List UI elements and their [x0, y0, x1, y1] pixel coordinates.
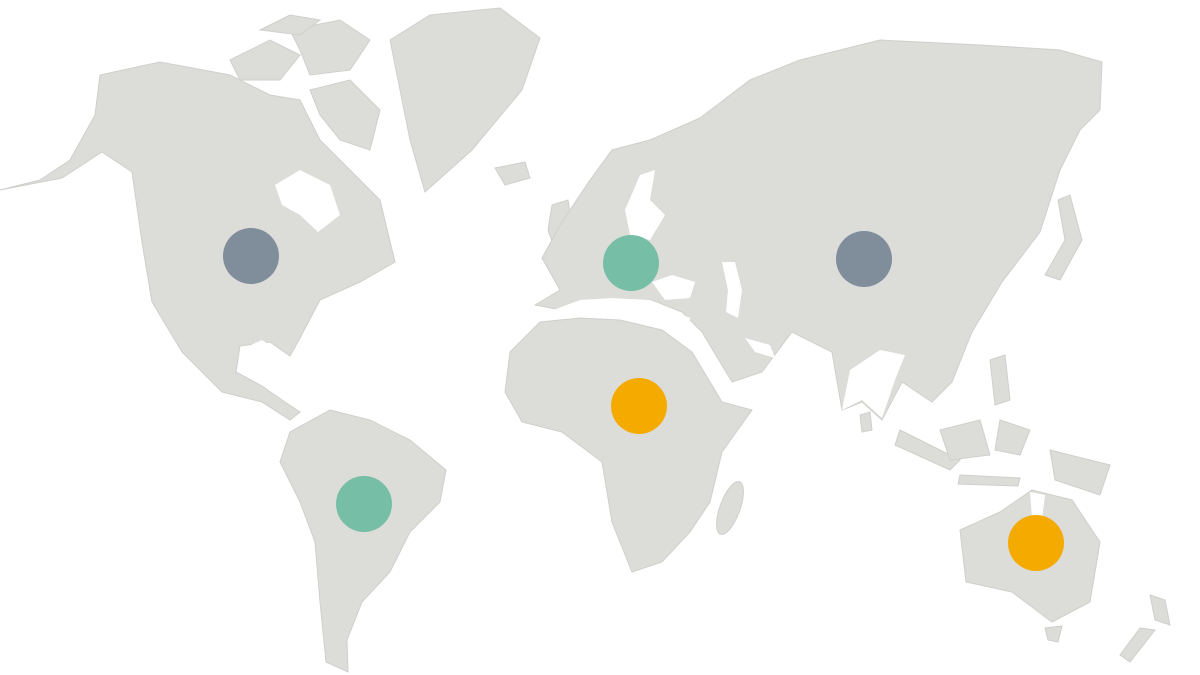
continent: australia — [960, 490, 1100, 622]
black sea — [652, 275, 695, 300]
continent: africa — [505, 318, 752, 572]
circle: asia — [836, 231, 892, 287]
persian gulf — [745, 338, 775, 358]
hudson bay — [275, 170, 340, 232]
mediterranean — [545, 298, 690, 330]
circle: south america — [336, 476, 392, 532]
islands of south east asia — [860, 355, 1110, 495]
continent: south america — [280, 410, 446, 672]
red sea — [690, 330, 740, 400]
tasmania — [1045, 626, 1062, 642]
uk — [548, 200, 575, 250]
circle: australia — [1008, 515, 1064, 571]
caspian sea — [722, 262, 742, 318]
arctic islands — [230, 15, 380, 150]
continent: eurasia — [535, 40, 1102, 420]
circle: europe — [603, 235, 659, 291]
iceland — [495, 162, 530, 185]
circle: africa — [611, 378, 667, 434]
water bodies — [240, 170, 1045, 520]
continent: north america — [0, 62, 395, 420]
baltic sea — [625, 170, 665, 240]
greenland — [390, 8, 540, 192]
circle: north america — [223, 228, 279, 284]
new zealand — [1120, 595, 1170, 662]
madagascar — [711, 478, 749, 538]
japan — [1045, 195, 1082, 280]
gulf of mexico — [240, 340, 290, 372]
gulf of carpentaria — [1030, 492, 1045, 520]
bay of bengal — [842, 350, 905, 418]
